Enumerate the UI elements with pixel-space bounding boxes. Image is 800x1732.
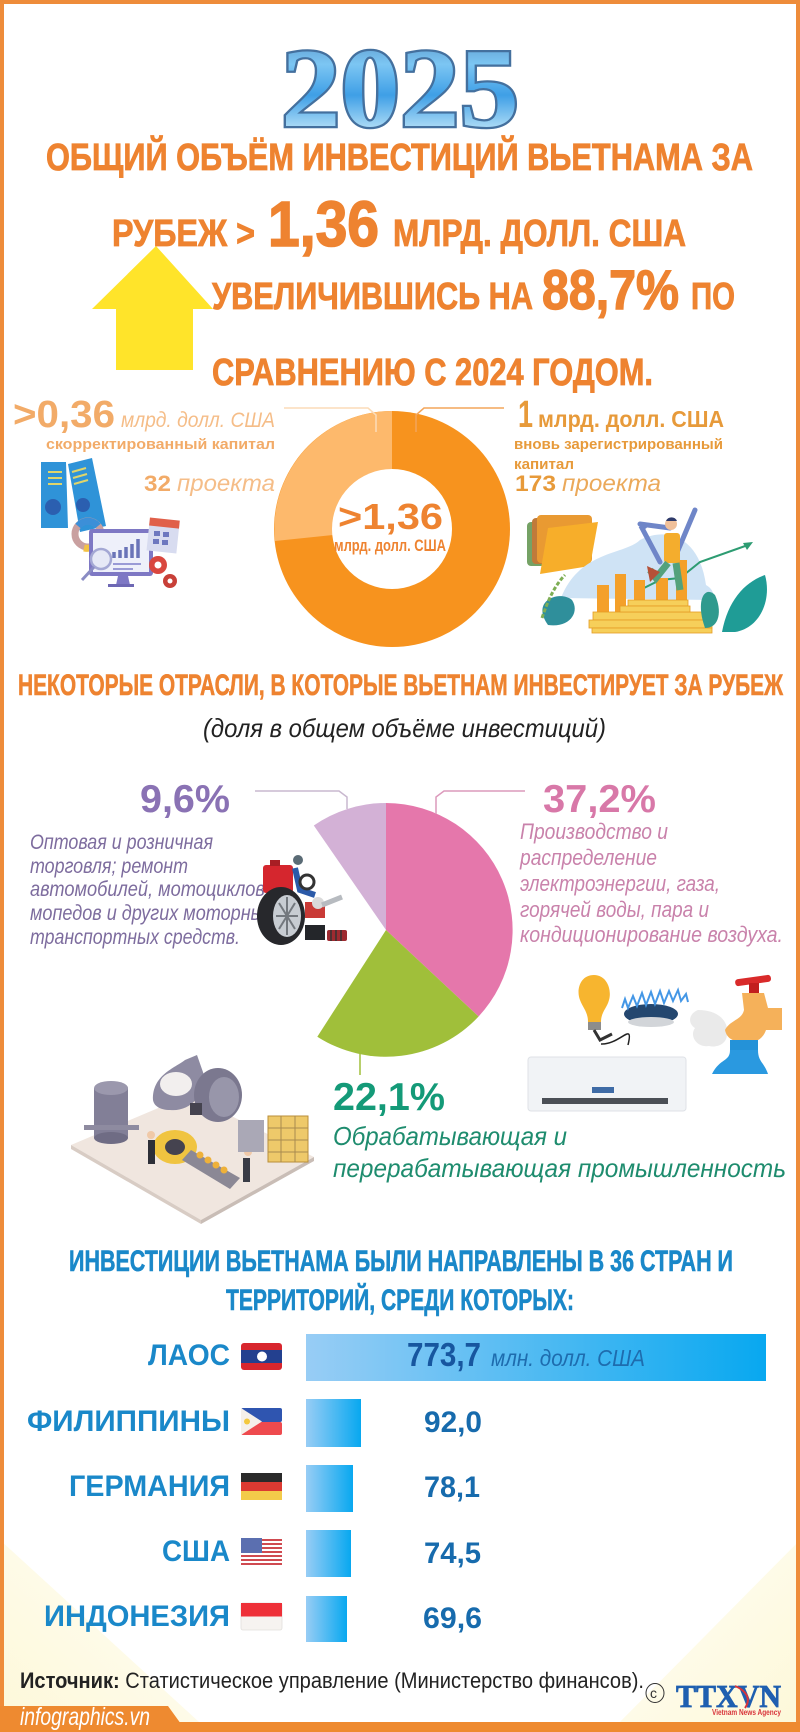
row: Indonesia: [44, 1596, 482, 1642]
row: Germany: ГЕРМАНИЯ: [69, 1470, 230, 1503]
subheading: (доля в общем объёме инвестиций): [203, 713, 606, 743]
logo: TTXVN: [676, 1678, 781, 1714]
row: Germany: 78,1: [424, 1471, 480, 1504]
donut chart: млрд. долл. США: [334, 536, 446, 555]
right donut label: [514, 394, 724, 496]
left donut label: млрд. долл. США: [121, 409, 275, 432]
donut chart: >1,36: [338, 496, 443, 537]
label: 9,6% trade: мопедов и других моторных: [30, 902, 274, 925]
right donut label: проекта: [562, 470, 661, 496]
right donut label: 1: [518, 394, 533, 436]
heading: countries: [69, 1245, 733, 1317]
label: 9,6% trade: автомобилей, мотоциклов,: [30, 878, 270, 901]
left donut label: >0,36: [13, 394, 115, 436]
donut chart: [274, 408, 510, 647]
copyright: [646, 1684, 664, 1702]
label: 9,6% trade: [30, 778, 274, 949]
title: УВЕЛИЧИВШИСЬ НА: [212, 276, 533, 318]
left donut label: проекта: [177, 470, 275, 496]
label: 37,2% energy: горячей воды, пара и: [520, 897, 709, 922]
icon: binders and monitor: [41, 458, 180, 588]
left donut label: скорректированный капитал: [46, 436, 275, 453]
logo: Vietnam News Agency: [712, 1708, 781, 1717]
label: 22,1% manufacturing: 22,1%: [333, 1076, 445, 1119]
label: 37,2% energy: [519, 778, 783, 947]
title: 1,36: [268, 188, 379, 260]
row: Philippines: 92,0: [424, 1406, 482, 1439]
icon: folders and investor on coins: [527, 510, 767, 633]
year 2025: 2025: [281, 27, 519, 151]
label: 9,6% trade: Оптовая и розничная: [30, 831, 213, 854]
left donut label: 32: [144, 471, 171, 496]
footer band: [0, 1703, 800, 1732]
row: Philippines: [27, 1399, 482, 1447]
label: 22,1% manufacturing: Обрабатывающая и: [333, 1121, 567, 1151]
label: 37,2% energy: Производство и: [520, 819, 668, 844]
row: Laos: млн. долл. США: [491, 1345, 645, 1371]
label: 22,1% manufacturing: [333, 1076, 786, 1183]
icon: bulb, gas, tap, air conditioner: [528, 975, 782, 1111]
label: 37,2% energy: электроэнергии, газа,: [520, 871, 720, 896]
title: ПО: [691, 276, 735, 318]
icon: yellow up arrow: [92, 246, 213, 370]
left donut label: [13, 394, 275, 496]
label: 9,6% trade: транспортных средств.: [30, 926, 240, 949]
label: 9,6% trade: торговля; ремонт: [30, 855, 188, 878]
label: 37,2% energy: распределение: [519, 845, 657, 870]
row: Indonesia: ИНДОНЕЗИЯ: [44, 1600, 230, 1633]
row: USA: 74,5: [424, 1537, 481, 1570]
pie chart: [255, 791, 525, 1075]
title: СРАВНЕНИЮ С 2024 ГОДОМ.: [212, 352, 653, 394]
copyright: c: [650, 1685, 657, 1701]
title: 88,7%: [542, 258, 679, 321]
row: Germany: [69, 1465, 480, 1512]
row: Indonesia: 69,6: [423, 1602, 482, 1635]
title: [46, 134, 753, 394]
icon: factory: [71, 1055, 314, 1224]
row: Laos: [148, 1334, 766, 1381]
row: Laos: ЛАОС: [148, 1339, 230, 1372]
title: РУБЕЖ >: [112, 213, 255, 255]
row: USA: США: [162, 1535, 230, 1568]
title: МЛРД. ДОЛЛ. США: [393, 213, 686, 255]
row: Philippines: ФИЛИППИНЫ: [27, 1405, 230, 1438]
right donut label: вновь зарегистрированный: [514, 436, 723, 453]
heading: countries: ТЕРРИТОРИЙ, СРЕДИ КОТОРЫХ:: [226, 1283, 574, 1317]
label: 9,6% trade: 9,6%: [140, 778, 230, 821]
right donut label: 173: [515, 471, 556, 496]
icon: tyre and auto parts: [257, 855, 347, 945]
right donut label: млрд. долл. США: [538, 406, 724, 432]
source: Источник: Статистическое управление (Министерство финансов).: [20, 1668, 644, 1693]
right donut label: капитал: [514, 456, 574, 473]
row: USA: [162, 1530, 481, 1577]
footer band: infographics.vn: [20, 1703, 150, 1731]
row: Laos: 773,7: [407, 1336, 481, 1373]
label: 37,2% energy: 37,2%: [543, 778, 656, 821]
